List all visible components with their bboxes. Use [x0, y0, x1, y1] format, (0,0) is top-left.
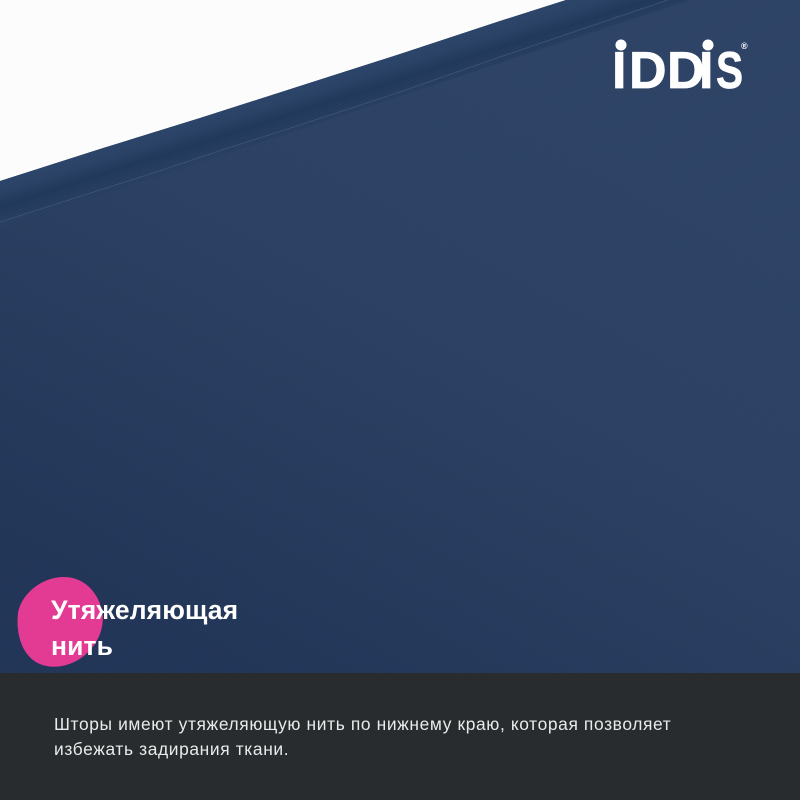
pink blob: [18, 577, 103, 667]
heading: Утяжеляющая: [51, 595, 238, 625]
body text: избежать задирания ткани.: [54, 739, 289, 759]
logo: IDDIS: IDD: [612, 42, 705, 100]
heading: нить: [51, 631, 113, 661]
hem band: [0, 0, 690, 229]
logo: IDDIS: S: [716, 41, 743, 99]
heading: [51, 595, 238, 661]
logo registered mark: ®: [741, 41, 748, 51]
body text: [54, 714, 671, 759]
stitch line: [0, 0, 668, 222]
logo: IDDIS: I: [699, 42, 713, 100]
footer band: [0, 673, 800, 800]
logo i dots: [616, 40, 713, 50]
logo: IDDIS: [612, 40, 748, 100]
body text: Шторы имеют утяжеляющую нить по нижнему краю, которая позволяет: [54, 714, 671, 734]
white background above the curtain: [0, 0, 800, 200]
